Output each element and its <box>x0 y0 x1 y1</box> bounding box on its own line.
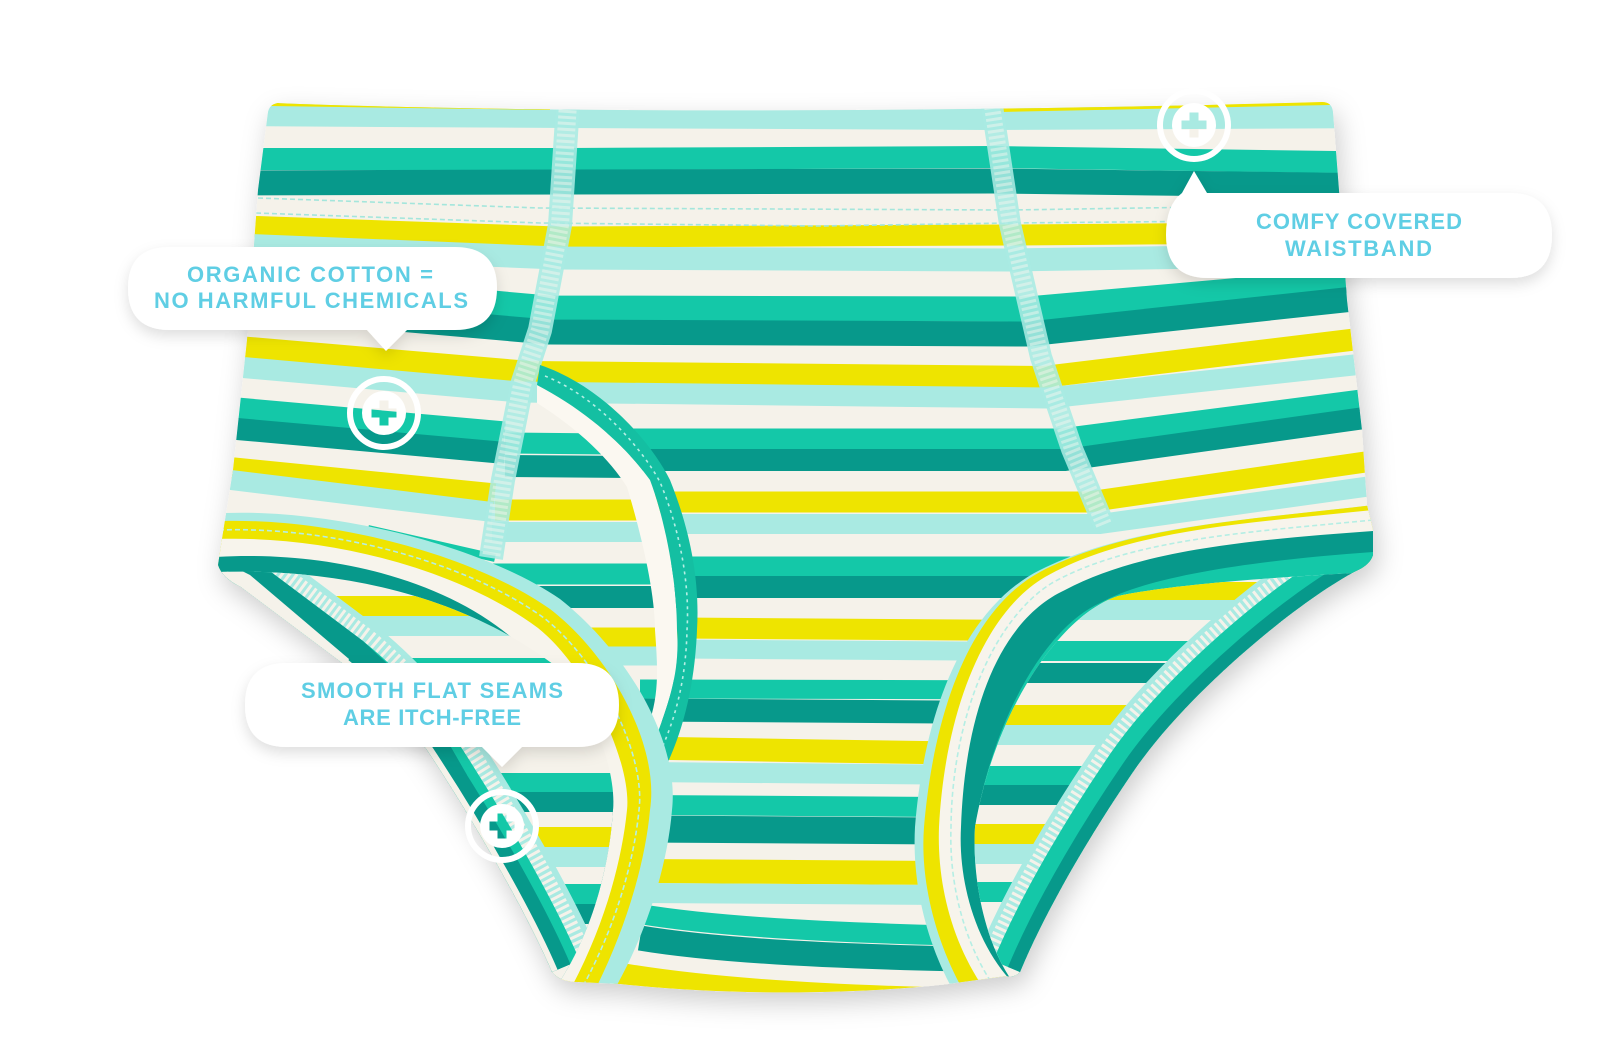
left leg binding <box>218 512 673 984</box>
callout: flat seams <box>245 663 619 767</box>
fly opening binding <box>537 365 698 762</box>
waistband stitching <box>256 198 1340 226</box>
right leg binding <box>914 506 1373 984</box>
icon: plus marker on waistband <box>1160 91 1228 159</box>
front seams <box>491 104 1104 558</box>
garment: striped organic cotton briefs <box>212 100 1388 1014</box>
callout: covered waistband <box>1166 171 1552 278</box>
garment base and shadow <box>218 102 1373 992</box>
callout: flat seams: SMOOTH FLAT SEAMS <box>301 678 563 703</box>
icon: plus marker on seam <box>468 792 536 860</box>
callout: covered waistband: WAISTBAND <box>1285 236 1432 261</box>
front panel stripes <box>215 103 1400 1000</box>
callout: organic cotton: ORGANIC COTTON = <box>187 262 433 287</box>
icon: plus marker on fabric <box>350 379 418 447</box>
callout: covered waistband: COMFY COVERED <box>1256 209 1462 234</box>
garment contents clipped to silhouette <box>218 102 1373 992</box>
left back panel with stripes and edge binding <box>221 572 614 979</box>
callout: organic cotton <box>128 247 497 351</box>
callout: flat seams: ARE ITCH-FREE <box>343 705 521 730</box>
callout: organic cotton: NO HARMFUL CHEMICALS <box>154 288 468 313</box>
right back panel with stripes and edge binding <box>974 573 1352 976</box>
